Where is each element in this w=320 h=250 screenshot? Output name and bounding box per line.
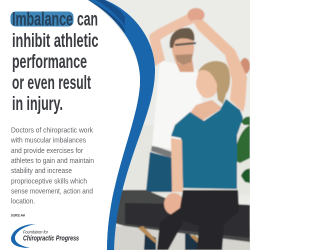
man: glasses bbox=[175, 43, 196, 45]
woman: leggings bbox=[157, 190, 239, 250]
woman: raised arm bbox=[192, 20, 247, 112]
man: neck and head bbox=[174, 58, 194, 72]
body text: Doctors of chiropractic work bbox=[11, 128, 93, 134]
man: jeans below table bbox=[144, 232, 156, 250]
source: SOURCE: AHA bbox=[11, 214, 25, 218]
woman: shirt bbox=[171, 99, 243, 189]
blue arc ring bbox=[0, 0, 155, 250]
woman: arm bbox=[171, 138, 183, 192]
body text: proprioceptive skills which bbox=[11, 178, 87, 185]
heading line 1: Imbalance bbox=[12, 10, 73, 30]
heading line 5: in injury. bbox=[12, 94, 63, 115]
heading line 3: performance bbox=[12, 52, 87, 73]
woman: neck bbox=[190, 100, 222, 122]
body text: with muscular imbalances bbox=[10, 138, 86, 145]
logo: Foundation for Chiropractic Progress bbox=[11, 224, 79, 248]
heading line 4: or even result bbox=[12, 73, 91, 94]
woman: face bbox=[196, 70, 217, 98]
man: jeans bbox=[146, 152, 172, 192]
plant bbox=[233, 117, 250, 183]
heading line 1 end: can bbox=[77, 10, 98, 30]
man: beard bbox=[175, 54, 193, 65]
photo: chiropractor and patient bbox=[80, 0, 255, 250]
body text bbox=[10, 128, 94, 206]
man: shirt bbox=[152, 60, 203, 150]
table legs bbox=[138, 226, 157, 243]
man: hair bbox=[170, 28, 194, 48]
highlight: Imbalance bbox=[10, 12, 74, 26]
body text: location. bbox=[11, 199, 35, 206]
logo swoosh bbox=[11, 224, 36, 248]
man: belt bbox=[151, 145, 172, 158]
logo line 2: Chiropractic Progress bbox=[23, 236, 79, 242]
heading line 2: inhibit athletic bbox=[12, 31, 99, 52]
man: raised arm bbox=[149, 13, 197, 66]
body text: stability and increase bbox=[11, 168, 72, 175]
table bbox=[110, 190, 250, 242]
hands bbox=[188, 8, 204, 22]
man: second leg below table bbox=[185, 232, 200, 250]
body text: and provide exercises for bbox=[11, 148, 84, 155]
logo line 1: Foundation for bbox=[23, 230, 48, 234]
body text: sense movement, action and bbox=[11, 188, 93, 195]
heading bbox=[10, 10, 99, 115]
body text: athletes to gain and maintain bbox=[11, 158, 94, 165]
floor bbox=[110, 226, 255, 250]
woman: hair bbox=[198, 61, 230, 104]
woman: hand bbox=[164, 193, 184, 215]
